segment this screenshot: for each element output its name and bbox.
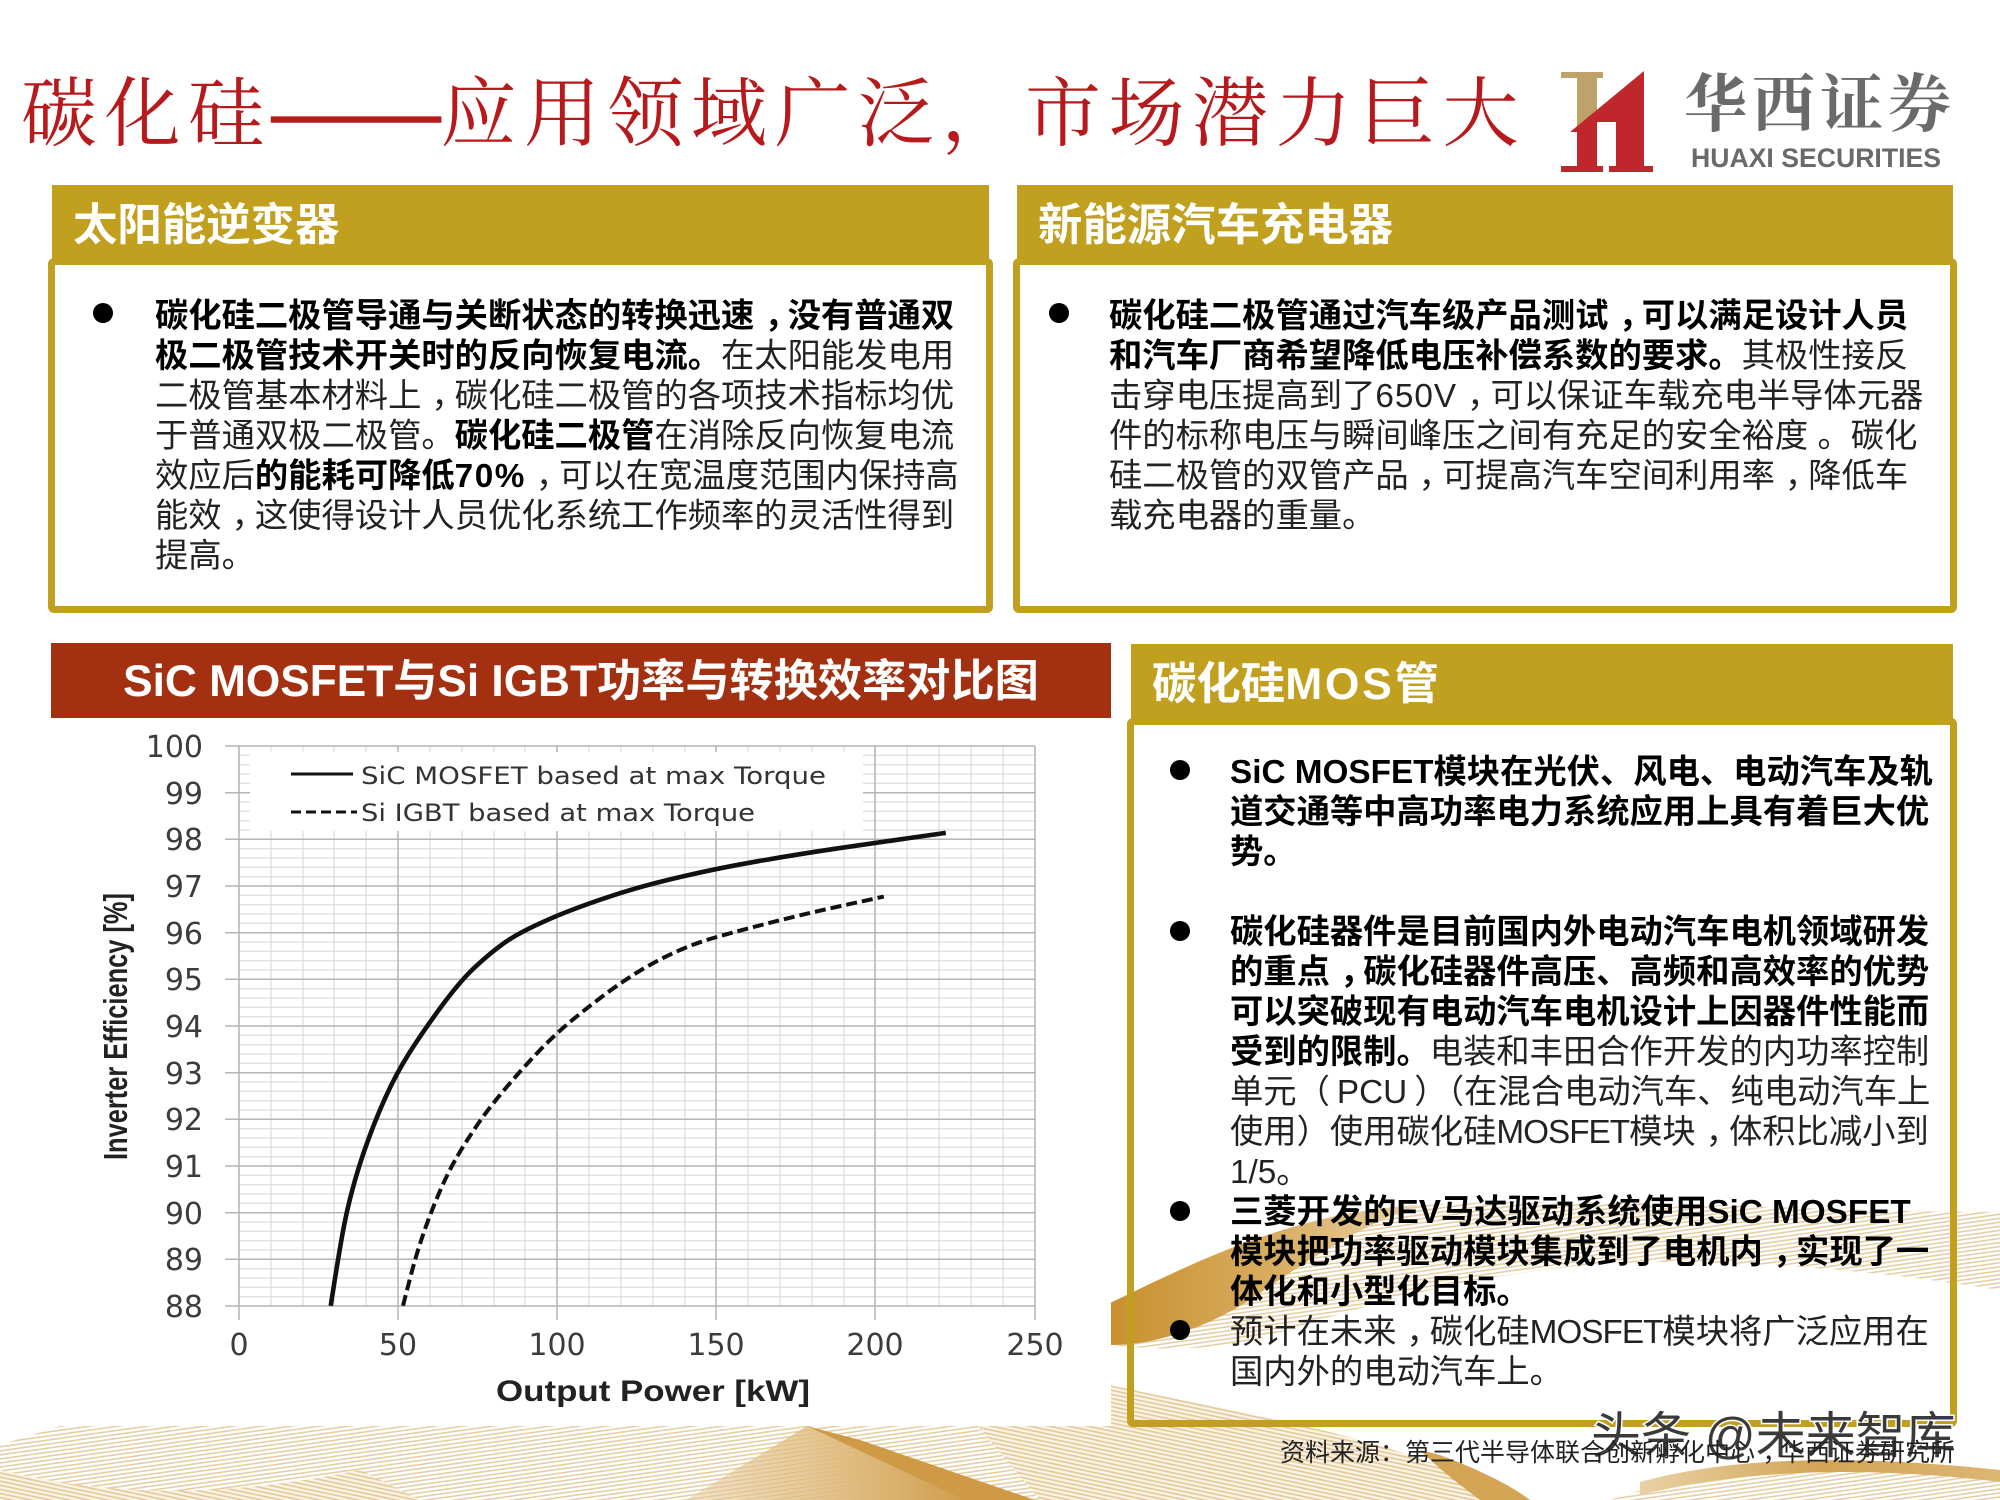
text block: SiC MOS: 道交通等中高功率电力系统应用上具有着巨大优: [1230, 794, 1929, 831]
bullet: [1170, 760, 1190, 780]
title: 碳化硅 应用领域广泛，市场潜力巨大: [21, 53, 1526, 162]
text block: SiC MOS: 势。: [1230, 834, 1297, 871]
text block: EV charger: 件的标称电压与瞬间峰压之间有充足的安全裕度 。碳化: [1109, 418, 1917, 455]
text block: solar inverter: 极二极管技术开关时的反向恢复电流。在太阳能发电用: [155, 338, 954, 375]
text block: solar inverter: [155, 298, 959, 575]
curve: SiC MOSFET: [331, 833, 946, 1306]
legend: [250, 752, 863, 831]
text block: EV charger: [1109, 298, 1923, 535]
text block: EV charger: 击穿电压提高到了650V ，可以保证车载充电半导体元器: [1109, 378, 1923, 415]
panel header: solar inverter: [52, 185, 989, 263]
icon: gold part of H mark: [1561, 72, 1603, 128]
text block: SiC MOS: 体化和小型化目标。: [1230, 1274, 1530, 1311]
logo name in English: HUAXI SECURITIES: [1691, 143, 1941, 173]
panel header: SiC MOS: 碳化硅MOS管: [1152, 660, 1439, 709]
y axis tick labels: 96: [165, 917, 203, 952]
text block: SiC MOS: 可以突破现有电动汽车电机设计上因器件性能而: [1230, 994, 1929, 1031]
text block: solar inverter: 碳化硅二极管导通与关断状态的转换迅速 ，没有普通双: [155, 298, 954, 335]
bullet: [93, 303, 113, 323]
text block: SiC MOS: SiC MOSFET模块在光伏、风电、电动汽车及轨: [1230, 754, 1933, 791]
chart heading: [51, 643, 1111, 718]
panel: EV charger: [1013, 258, 1957, 613]
text block: solar inverter: 效应后的能耗可降低70% ，可以在宽温度范围内保持高: [155, 458, 959, 495]
x axis tick labels: 250: [1006, 1328, 1064, 1363]
x axis tick labels: 100: [528, 1328, 586, 1363]
x axis tick labels: 200: [846, 1328, 904, 1363]
bullet: [1170, 921, 1190, 941]
text block: EV charger: 和汽车厂商希望降低电压补偿系数的要求。其极性接反: [1109, 338, 1908, 375]
y axis tick labels: 90: [165, 1197, 203, 1232]
text block: SiC MOS: 受到的限制。电装和丰田合作开发的内功率控制: [1230, 1034, 1929, 1071]
legend: SiC MOSFET based at max Torque: [361, 762, 826, 790]
text block: SiC MOS: 模块把功率驱动模块集成到了电机内 ，实现了一: [1230, 1234, 1929, 1271]
text block: SiC MOS: [1230, 754, 1933, 1391]
watermark: 头条 @未来智库: [1591, 1408, 1956, 1464]
y axis tick labels: 99: [165, 777, 203, 812]
text block: SiC MOS: 碳化硅器件是目前国内外电动汽车电机领域研发: [1230, 914, 1929, 951]
bullet: [1170, 1201, 1190, 1221]
x axis title: Output Power [kW]: [496, 1375, 810, 1408]
y axis tick labels: 88: [165, 1290, 203, 1325]
y axis tick labels: 93: [165, 1057, 203, 1092]
x axis tick labels: 50: [379, 1328, 417, 1363]
y axis tick labels: 98: [165, 823, 203, 858]
logo: Huaxi Securities: [1561, 60, 1956, 173]
text block: solar inverter: 于普通双极二极管。碳化硅二极管在消除反向恢复电流: [155, 418, 954, 455]
chart panel background: [51, 718, 1111, 1426]
y axis tick labels: 100: [146, 730, 203, 765]
x axis tick labels: 0: [229, 1328, 249, 1363]
panel: SiC MOS: [1127, 718, 1957, 1427]
text block: EV charger: 硅二极管的双管产品 ，可提高汽车空间利用率 ，降低车: [1109, 458, 1908, 495]
panel header: EV charger: [1017, 185, 1953, 263]
text block: solar inverter: 二极管基本材料上 ，碳化硅二极管的各项技术指标均优: [155, 378, 954, 415]
panel header: EV charger: 新能源汽车充电器: [1038, 201, 1393, 250]
y axis tick labels: 94: [165, 1010, 203, 1045]
y axis tick labels: 91: [165, 1150, 203, 1185]
panel header: SiC MOS: [1131, 644, 1953, 722]
y axis tick labels: 92: [165, 1103, 203, 1138]
x axis tick labels: [229, 1328, 1064, 1363]
panel header: solar inverter: 太阳能逆变器: [73, 201, 339, 250]
title: ——: [268, 53, 454, 162]
line chart: inverter efficiency vs output power: [97, 730, 1064, 1408]
chart heading: SiC MOSFET与Si IGBT功率与转换效率对比图: [123, 657, 1039, 706]
curve: Si IGBT: [403, 897, 884, 1306]
x axis tick labels: 150: [687, 1328, 745, 1363]
source note: 资料来源：第三代半导体联合创新孵化中心 ，华西证券研究所: [1280, 1439, 1955, 1467]
y axis tick labels: 97: [165, 870, 203, 905]
legend: Si IGBT based at max Torque: [361, 799, 755, 827]
text block: SiC MOS: 国内外的电动汽车上。: [1230, 1354, 1563, 1391]
text block: EV charger: 载充电器的重量。: [1109, 498, 1375, 535]
text block: SiC MOS: 三菱开发的EV马达驱动系统使用SiC MOSFET: [1230, 1194, 1911, 1231]
panel: solar inverter: [48, 258, 993, 613]
text block: SiC MOS: 预计在未来 ，碳化硅MOSFET模块将广泛应用在: [1230, 1314, 1929, 1351]
text block: SiC MOS: 的重点 ，碳化硅器件高压、高频和高效率的优势: [1230, 954, 1929, 991]
icon: red part of H mark: [1561, 71, 1653, 172]
text block: EV charger: 碳化硅二极管通过汽车级产品测试 ，可以满足设计人员: [1109, 298, 1908, 335]
y axis tick labels: [146, 730, 203, 1325]
text block: SiC MOS: 使用）使用碳化硅MOSFET模块 ，体积比减小到: [1230, 1114, 1929, 1151]
y axis tick labels: 89: [165, 1243, 203, 1278]
text block: SiC MOS: 1/5。: [1230, 1154, 1310, 1191]
text block: solar inverter: 提高。: [155, 538, 255, 575]
text block: SiC MOS: 单元（PCU）（在混合电动汽车、纯电动汽车上: [1230, 1074, 1930, 1111]
bullet: [1170, 1320, 1190, 1340]
bullet: [1049, 303, 1069, 323]
y axis tick labels: 95: [165, 963, 203, 998]
text block: solar inverter: 能效 ，这使得设计人员优化系统工作频率的灵活性得到: [155, 498, 954, 535]
y axis title: Inverter Efficiency [%]: [97, 893, 134, 1160]
